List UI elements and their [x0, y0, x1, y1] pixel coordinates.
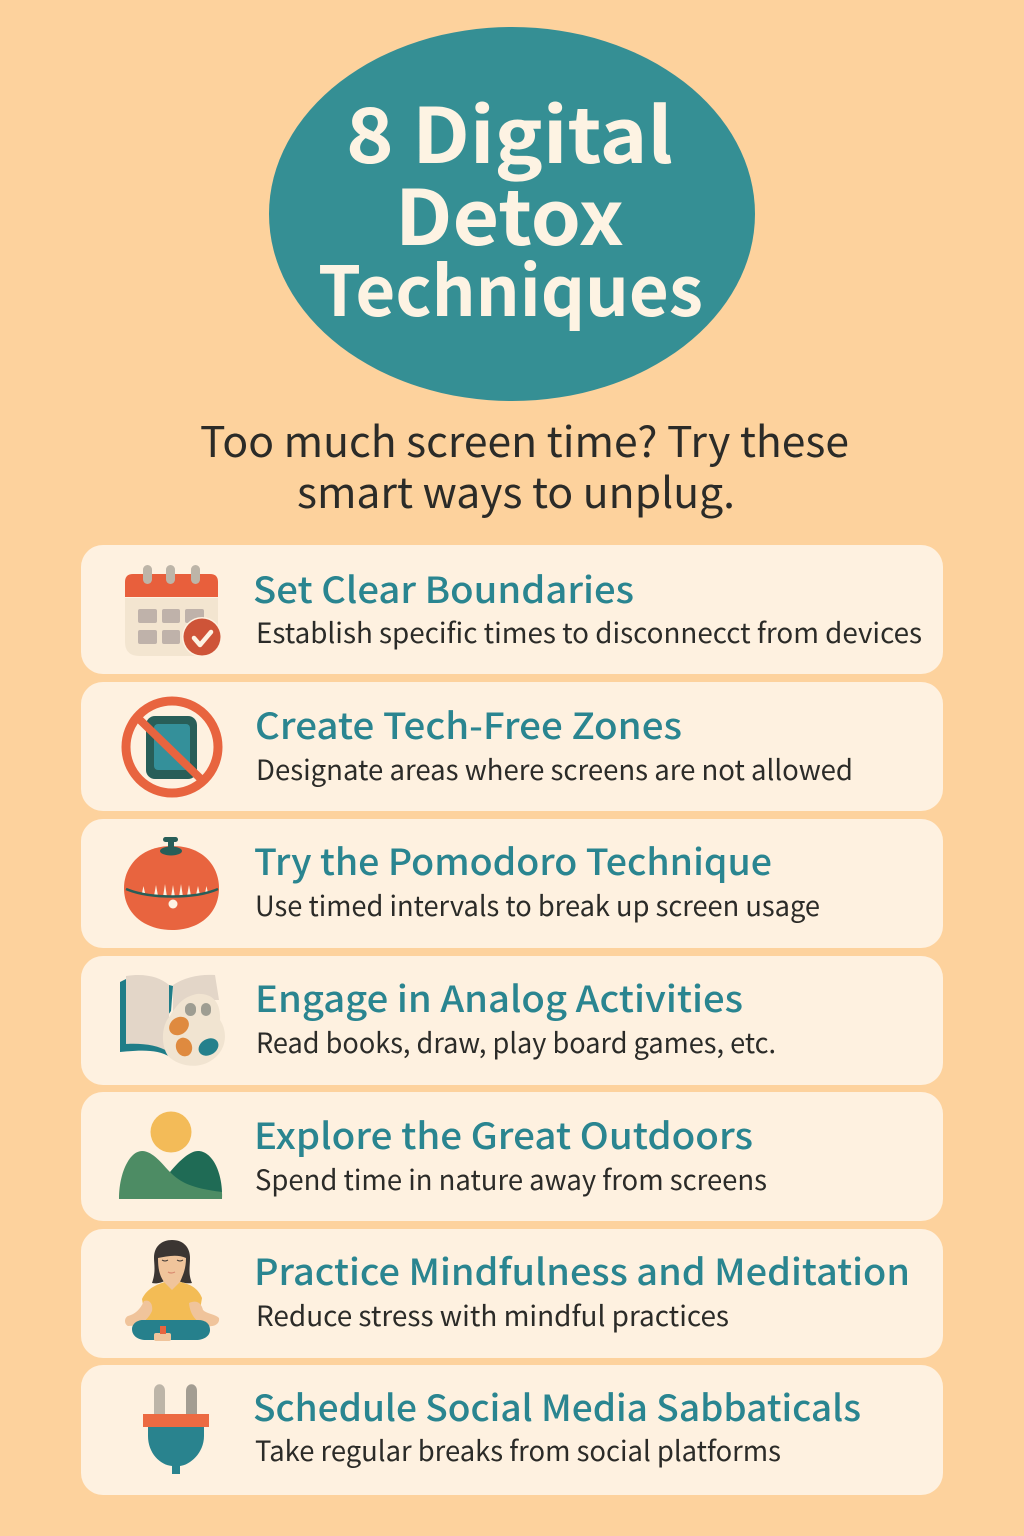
panel: mindfulness and meditation	[81, 1229, 943, 1358]
panel: pomodoro technique	[81, 819, 943, 948]
icon: tomato timer	[124, 837, 219, 930]
icon: sun and mountains	[119, 1112, 222, 1199]
description: Reduce stress with mindful practices	[256, 1295, 729, 1335]
heading: Engage in Analog Activities	[255, 971, 743, 1023]
icon: no tablet sign	[126, 701, 218, 793]
description: Take regular breaks from social platforms	[255, 1430, 781, 1470]
title: 8 Digital	[346, 75, 673, 185]
subtitle: smart ways to unplug.	[297, 460, 735, 521]
title	[318, 75, 703, 336]
panel: social media sabbaticals	[81, 1365, 943, 1495]
title: Detox	[395, 157, 624, 267]
heading: Explore the Great Outdoors	[254, 1108, 753, 1160]
heading: Schedule Social Media Sabbaticals	[253, 1380, 861, 1432]
title: Techniques	[318, 236, 703, 336]
heading: Practice Mindfulness and Meditation	[254, 1244, 910, 1296]
panel: analog activities	[81, 956, 943, 1085]
icon: meditating person	[125, 1240, 219, 1341]
icon: calendar with check	[125, 565, 222, 657]
description: Establish specific times to disconnecct from devices	[256, 612, 922, 652]
description: Read books, draw, play board games, etc.	[256, 1022, 776, 1062]
heading: Set Clear Boundaries	[253, 562, 634, 614]
description: Use timed intervals to break up screen usage	[255, 885, 820, 925]
title badge	[269, 27, 755, 401]
panel: create tech-free zones	[81, 682, 943, 811]
subtitle: Too much screen time? Try these	[200, 409, 849, 470]
icon: book and palette	[120, 975, 225, 1066]
description: Spend time in nature away from screens	[255, 1159, 767, 1199]
heading: Try the Pomodoro Technique	[254, 834, 772, 886]
subtitle	[200, 409, 849, 521]
description: Designate areas where screens are not allowed	[256, 749, 853, 789]
panel: set clear boundaries	[81, 545, 943, 674]
panel: great outdoors	[81, 1092, 943, 1221]
icon: plug	[143, 1384, 209, 1474]
heading: Create Tech-Free Zones	[255, 698, 682, 750]
